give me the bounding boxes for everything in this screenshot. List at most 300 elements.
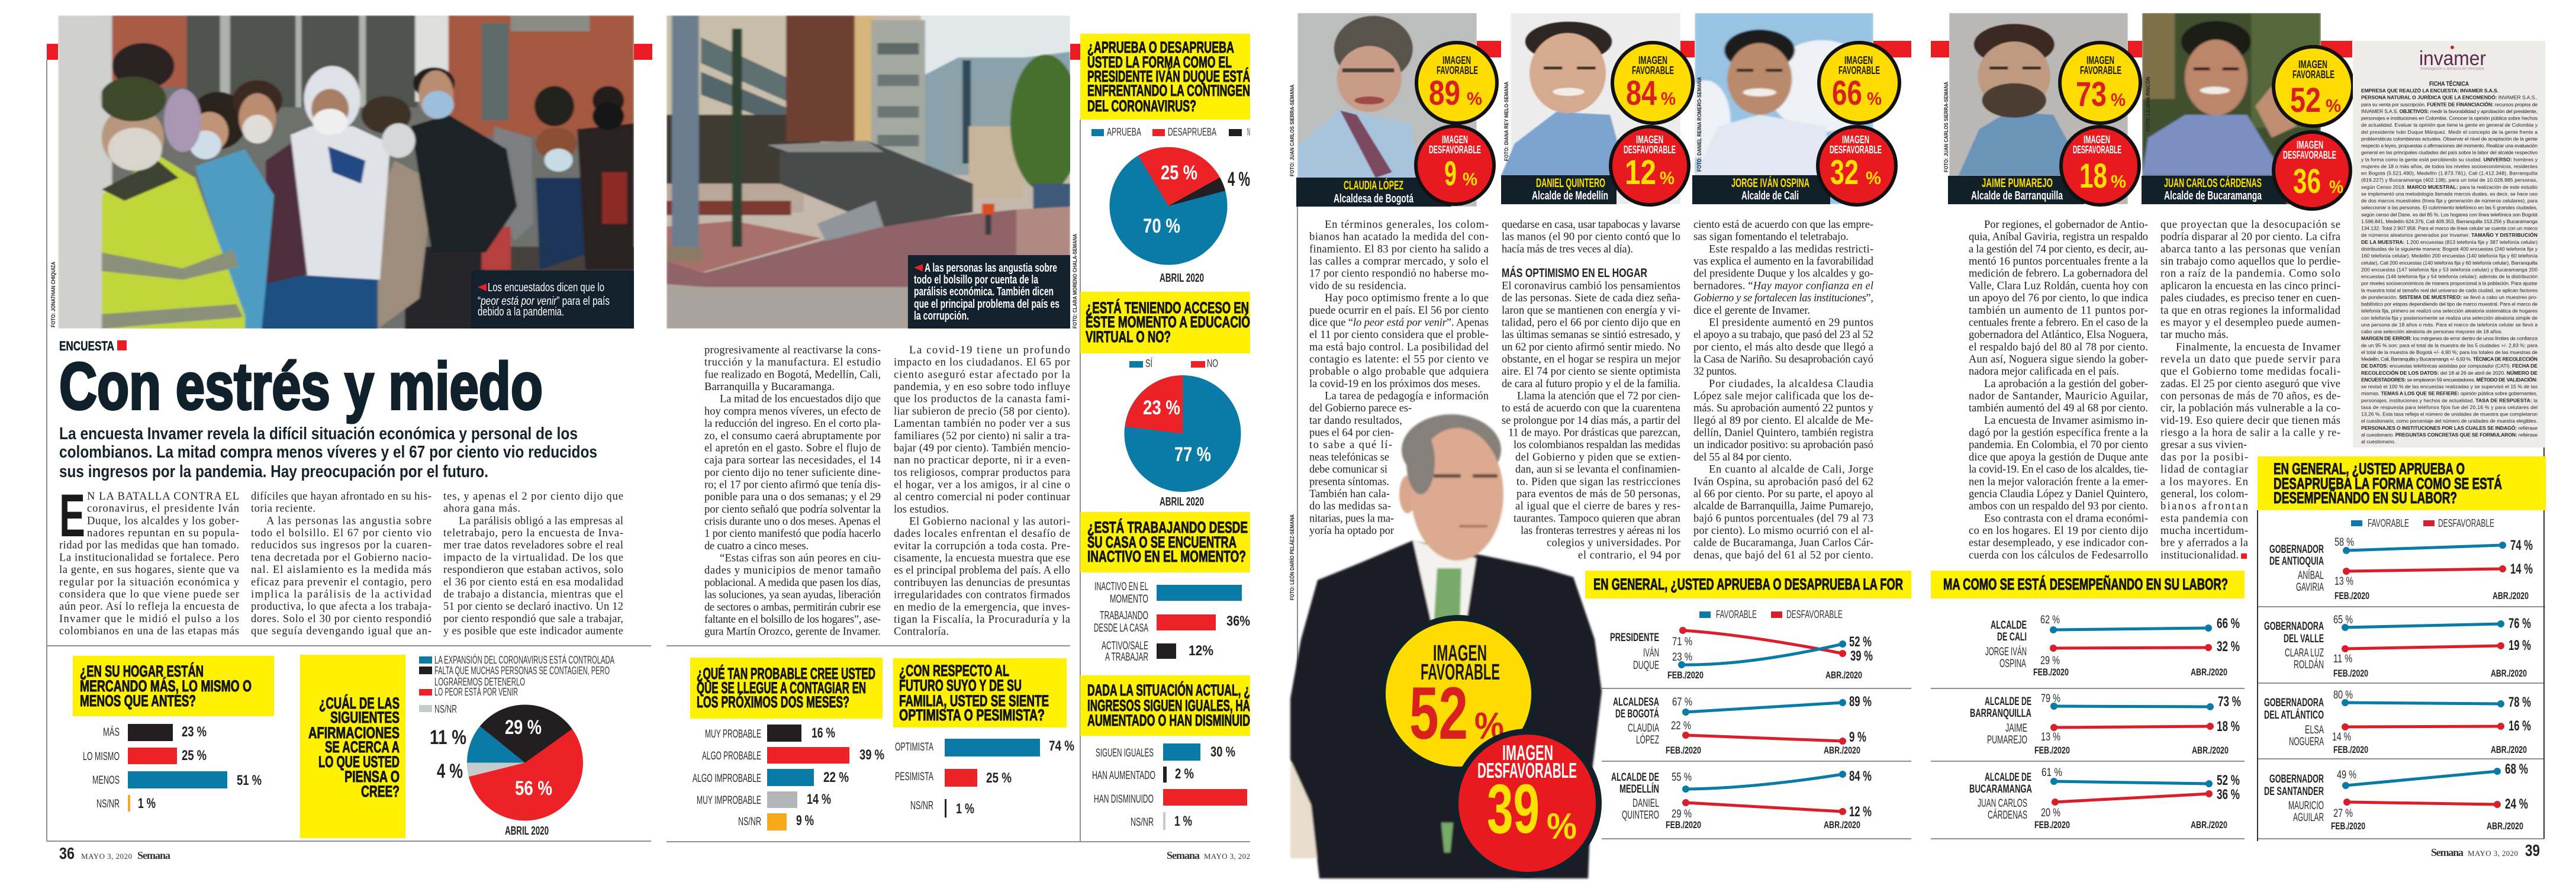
- line chart: gobernadora del Valle: 19 %: [2509, 638, 2531, 653]
- badges: Quintero: 84: [1626, 74, 1657, 112]
- line chart: gobernador de Santander: DE SANTANDER: [2264, 785, 2324, 798]
- article text page 38: El coronavirus cambió los pensamientos: [1502, 280, 1680, 292]
- bar chart: mercado en el hogar: MENOS: [92, 774, 120, 787]
- ficha tecnica text: se implementó una metodología llamada marcos duales, es decir, se hace uso: [2361, 191, 2538, 197]
- pie chart: afirmaciones: NS/NR: [434, 703, 457, 715]
- article text page 36: La parálisis obligó a las empresas al: [459, 515, 623, 527]
- photo credits mayors: [1289, 77, 2151, 176]
- line chart: alcalde de Barranquilla: [1970, 693, 2241, 756]
- ficha tecnica text: EMPRESA QUE REALIZÓ LA ENCUESTA: INVAMER S.A.S.: [2361, 87, 2498, 94]
- photo caption: street: A las personas las angustia sobre: [925, 262, 1057, 275]
- footer page 39: 39: [2525, 841, 2540, 859]
- badges: Quintero: DESFAVORABLE: [1624, 144, 1676, 156]
- article text page 38: quedarse en casa, usar tapabocas y lavarse: [1502, 219, 1680, 231]
- line chart: gobernadora del Atlantico: GOBERNADORA: [2264, 697, 2324, 709]
- line chart: gobernador de Santander: AGUILAR: [2293, 812, 2324, 824]
- badge: imagen favorable Duque: 52: [1409, 672, 1468, 755]
- photo credits mayors: FOTO: JUAN CARLOS SIERRA-SEMANA: [1943, 82, 1949, 172]
- badge: imagen favorable Duque: IMAGEN: [1433, 641, 1487, 666]
- pie chart: afirmaciones: SIGUIENTES: [330, 709, 400, 726]
- article text page 38: bajó 6 puntos porcentuales (del 79 al 73: [1693, 513, 1873, 524]
- line chart: presidente Duque: PRESIDENTE: [1610, 632, 1659, 644]
- portrait: Juan Carlos Cardenas: [2142, 13, 2321, 205]
- line chart: alcalde de Barranquilla: 79 %: [2041, 693, 2060, 705]
- article text page 38: los colombianos respaldan las medidas: [1514, 439, 1680, 451]
- article text page 36: N LA BATALLA CONTRA EL: [87, 491, 239, 503]
- article text page 36: nal. El aislamiento es la medida más: [251, 564, 432, 576]
- line chart: alcalde de Bucaramanga: 61 %: [2042, 767, 2062, 779]
- line chart: alcalde de Cali: OSPINA: [1999, 658, 2026, 670]
- article text page 39: la covid-19. En el caso de los alcaldes, tie-: [1969, 464, 2148, 476]
- legend: FAVORABLE: [2368, 517, 2409, 529]
- article text page 38: para eventos de más de 50 personas,: [1516, 488, 1680, 500]
- badges: Ospina: %: [1866, 168, 1881, 188]
- pie chart: educacion virtual: 23 %: [1143, 397, 1180, 419]
- pie chart: educacion virtual: ESTE MOMENTO A EDUCACIÓ: [1086, 313, 1250, 331]
- bar chart: trabajo: INACTIVO EN EL MOMENTO?: [1087, 548, 1246, 565]
- article text page 39: tar mucho más.: [2160, 329, 2229, 341]
- article text page 39: nen la mejor valoración frente a la emer-: [1969, 476, 2148, 488]
- article text page 39: zadas. El 25 por ciento aseguró que vive: [2160, 378, 2340, 390]
- footer page 39: MAYO 3, 2020: [2468, 849, 2518, 858]
- portrait: Claudia Lopez: [1297, 13, 1477, 207]
- deck: colombianos. La mitad compra menos víveres y el 67 por ciento vio reducidos: [59, 443, 597, 462]
- line chart: gobernador de Antioquia: GOBERNADOR: [2269, 543, 2324, 556]
- article text page 38: yoría ha optado por: [1309, 525, 1394, 537]
- ficha tecnica text: respecto a leyes, propuestas o afirmaciones del momento. Realizar una evaluación: [2361, 143, 2538, 149]
- line chart: gobernador de Santander: FEB./2020: [2331, 820, 2365, 832]
- article text page 38: la covid-19 en los próximos dos meses.: [1309, 378, 1480, 390]
- bar chart: probabilidad de contagio: 16 %: [812, 725, 835, 741]
- article text page 37: “Estas cifras son aún peores en ciu-: [720, 553, 881, 565]
- article text page 38: tar dando resultados,: [1309, 415, 1402, 427]
- ficha tecnica text: al cuestionario.: [2361, 439, 2395, 445]
- line chart: alcalde de Cali: ALCALDE: [1991, 619, 2027, 632]
- article text page 39: esta pandemia con: [2160, 513, 2248, 524]
- article text page 37: de sectores o ambas, permitirán cubrir ese: [704, 601, 881, 613]
- article text page 38: Este respaldo a las medidas restricti-: [1709, 243, 1873, 255]
- bar chart: ingresos: 1 %: [1174, 813, 1192, 829]
- article text page 38: por ciento). Lo mismo ocurrió con el al-: [1693, 525, 1873, 537]
- badge: imagen desfavorable Duque: DESFAVORABLE: [1477, 758, 1577, 783]
- article text page 37: irregularidades con contratos firmados: [894, 590, 1070, 601]
- line chart: presidente Duque: [1610, 627, 1873, 681]
- badges: Cardenas: 52: [2290, 81, 2321, 120]
- bar chart: mercado en el hogar: MENOS QUE ANTES?: [80, 692, 196, 710]
- article text page 38: to sabe a qué lí-: [1309, 439, 1392, 451]
- line chart: gobernador de Antioquia: ABR./2020: [2493, 590, 2529, 601]
- badges: Pumarejo: FAVORABLE: [2080, 65, 2121, 76]
- ficha tecnica text: ENCUESTADORES: se emplearon 59 encuestadores. MÉTODO DE VALIDACIÓN:: [2361, 376, 2538, 382]
- article text page 37: dades locales enfrentan el desafío de: [894, 528, 1070, 540]
- bar chart: trabajo: INACTIVO EN EL: [1094, 581, 1148, 593]
- line chart: alcalde de Medellin: ABR./2020: [1824, 819, 1860, 830]
- article text page 38: calde de Bucaramanga, Juan Carlos Cár-: [1693, 537, 1873, 549]
- article text page 38: Iván Ospina, su aprobación pasó del 62: [1693, 476, 1873, 488]
- line chart: alcalde de Barranquilla: BARRANQUILLA: [1970, 707, 2031, 720]
- article text page 38: llegó al 89 por ciento. El alcalde de Me-: [1693, 415, 1873, 427]
- article text page 38: to. Piden que sigan las restricciones: [1516, 476, 1680, 488]
- article text page 38: denas, que bajó del 61 al 52 por ciento.: [1693, 549, 1873, 561]
- article text page 37: de cuatro a cinco meses.: [704, 540, 809, 552]
- article text page 39: [1969, 219, 2341, 561]
- article text page 37: las soluciones, ya sean ayudas, liberación: [704, 590, 881, 601]
- article text page 38: colegios y universidades. Por: [1547, 537, 1680, 549]
- article text page 39: también un aumento de 11 puntos por-: [1969, 305, 2148, 317]
- line chart: alcaldesa de Bogota: 89 %: [1849, 694, 1872, 710]
- article text page 38: del presidente Duque y los alcaldes y go-: [1693, 268, 1873, 280]
- article text page 39: es mayor y el desempleo puede aumen-: [2160, 317, 2340, 329]
- heading band: alcaldes (spread): [1585, 571, 2245, 598]
- line chart: gobernadora del Atlantico: [2264, 689, 2531, 755]
- pie chart: aprobacion Duque: ENFRENTANDO LA CONTINGEN: [1087, 82, 1250, 99]
- article text page 38: las calles a comprar mercado, y solo el: [1309, 256, 1489, 268]
- article text page 37: caja para sortear las necesidades, el 14: [704, 455, 881, 466]
- footer page 37: MAYO 3, 202: [1204, 852, 1250, 861]
- badges: Pumarejo: IMAGEN: [2084, 134, 2110, 146]
- badges: Quintero: %: [1660, 168, 1675, 188]
- article text page 37: liar subieron de precio (58 por ciento).: [894, 405, 1070, 417]
- bar chart: ingresos: HAN AUMENTADO: [1092, 770, 1155, 782]
- pie chart: aprobacion Duque: ¿APRUEBA O DESAPRUEBA: [1087, 38, 1234, 56]
- deck: sus ingresos por la pandemia. Hay preocupación por el futuro.: [59, 462, 488, 481]
- bar chart: optimismo: NS/NR: [910, 800, 933, 812]
- bar chart: mercado en el hogar: 1 %: [138, 796, 156, 812]
- title: Con estrés y miedo: [59, 349, 543, 423]
- line chart: alcalde de Bucaramanga: [1969, 767, 2240, 830]
- article text page 37: hoy compra menos víveres, un efecto de: [704, 405, 881, 417]
- badges: Cardenas: 36: [2293, 162, 2321, 201]
- ficha tecnica text: encuestas (146 telefonía fija y 54 telefonía celular); además de la distribución: [2361, 273, 2538, 279]
- line chart: gobernadora del Valle: 65 %: [2333, 614, 2353, 626]
- line chart: gobernadora del Valle: 11 %: [2333, 653, 2352, 665]
- bar chart: probabilidad de contagio: MUY PROBABLE: [705, 728, 761, 741]
- article text page 36: Invamer que le midió el pulso a los: [59, 613, 239, 625]
- article text page 36: La institucionalidad se fortalece. Pero: [59, 552, 239, 564]
- line chart: gobernadora del Atlantico: ELSA: [2305, 724, 2324, 736]
- bar chart: trabajo: SU CASA O SE ENCUENTRA: [1087, 533, 1237, 551]
- bar chart: optimismo: PESIMISTA: [895, 771, 933, 783]
- article text page 38: probable o algo probable que adquiera: [1309, 366, 1489, 378]
- badges: Cardenas: [2274, 47, 2353, 209]
- ficha tecnica text: la muestra total al tamaño real del universo de cada ciudad, se aplican factores: [2361, 287, 2538, 293]
- article text page 39: pandemia. En Colombia, el 70 por ciento: [1969, 439, 2148, 451]
- article text page 38: vas explica el aumento en la favorabilidad: [1693, 256, 1874, 268]
- bar chart: trabajo: A TRABAJAR: [1105, 651, 1148, 664]
- line chart: presidente Duque: FEB./2020: [1667, 669, 1704, 681]
- line chart: gobernador de Antioquia: DE ANTIOQUIA: [2269, 555, 2324, 568]
- article text page 36: de trabajo a distancia, mientras que el: [443, 588, 623, 600]
- portrait: Jorge Ivan Ospina: [1680, 13, 1876, 204]
- bar chart: probabilidad de contagio: LOS PRÓXIMOS DOS MESES?: [697, 693, 849, 711]
- article text page 36: respondieron que estaban activos, solo: [443, 564, 623, 576]
- line chart: gobernadora del Valle: CLARA LUZ: [2285, 647, 2324, 659]
- article text page 36: 51 por ciento se declaró inactivo. Un 12: [443, 601, 623, 613]
- name bar: Claudia Lopez: [1296, 178, 1451, 207]
- section label: ENCUESTA: ENCUESTA: [59, 339, 114, 353]
- line chart: alcalde de Barranquilla: ABR./2020: [2192, 745, 2229, 756]
- footer page 36: [59, 844, 170, 862]
- heading band: alcaldes (spread): MA COMO SE ESTÁ DESEMPEÑANDO EN SU LABOR?: [1943, 575, 2228, 593]
- article text page 39: ron a raíz de la pandemia. Como solo: [2160, 268, 2340, 280]
- bar chart: ingresos: AUMENTADO O HAN DISMINUID: [1087, 712, 1250, 729]
- bar chart: trabajo: ¿ESTÁ TRABAJANDO DESDE: [1087, 518, 1248, 536]
- bar chart: mercado en el hogar: 51 %: [237, 772, 262, 788]
- line chart: gobernador de Santander: 68 %: [2505, 761, 2528, 777]
- line chart: alcalde de Medellin: DANIEL: [1632, 797, 1659, 810]
- bar chart: mercado en el hogar: ¿EN SU HOGAR ESTÁN: [80, 662, 204, 680]
- ficha tecnica text: al cuestionario. PREGUNTAS CONCRETAS QUE SE FORMULARON: refiérase: [2361, 432, 2538, 438]
- photo credit: FOTO: CLARA MORENO CHALA-SEMANA: [1072, 234, 1078, 329]
- legend: [1699, 609, 1843, 620]
- article text page 39: Finalmente, la encuesta de Invamer: [2176, 342, 2340, 353]
- line chart: gobernador de Antioquia: [2269, 536, 2533, 601]
- article text page 36: tes, y apenas el 2 por ciento dijo que: [443, 491, 623, 503]
- line chart: gobernadora del Atlantico: 78 %: [2509, 694, 2531, 710]
- pie chart: aprobacion Duque: USTED LA FORMA COMO EL: [1087, 53, 1232, 71]
- article text page 38: sas sigan fomentando el teletrabajo.: [1693, 231, 1849, 243]
- ficha tecnica text: celular), Cali 200 encuestas (140 telefonía fija y 60 telefonía celular), Barranquilla: [2361, 260, 2538, 266]
- article text page 37: Contraloría.: [894, 626, 949, 638]
- article text page 38: MÁS OPTIMISMO EN EL HOGAR: [1502, 266, 1647, 280]
- article text page 39: dagó por la gestión específica frente a la: [1969, 427, 2148, 439]
- article text page 37: poblacional. A medida que pasen los días,: [704, 577, 881, 589]
- article text page 36: que seguía devengando igual que an-: [251, 625, 432, 637]
- photo caption: queue: Los encuestados dicen que lo: [488, 281, 604, 294]
- line chart: alcalde de Medellin: QUINTERO: [1622, 809, 1659, 822]
- line chart: gobernadora del Valle: FEB./2020: [2333, 668, 2368, 679]
- line chart: gobernadora del Atlantico: 80 %: [2333, 689, 2353, 701]
- article text page 37: crisis durante uno o dos meses. Apenas el: [704, 516, 881, 528]
- line chart: alcalde de Medellin: 55 %: [1672, 771, 1692, 784]
- line chart: gobernador de Antioquia: 13 %: [2334, 575, 2353, 588]
- line chart: gobernadora del Atlantico: DEL ATLÁNTICO: [2264, 709, 2324, 722]
- article text page 36: ahora gana más.: [443, 503, 520, 515]
- article text page 37: la reducción del ingreso. En el corto pla-: [704, 418, 881, 430]
- ficha tecnica text: general en las principales ciudades del país sobre la labor del alcalde respectivo: [2361, 150, 2538, 156]
- badges: Pumarejo: 18: [2079, 157, 2107, 195]
- article text page 37: trucción y la manufactura. El estudio: [704, 357, 881, 369]
- line chart: alcalde de Medellin: 84 %: [1849, 768, 1872, 784]
- bar chart: probabilidad de contagio: 39 %: [859, 747, 884, 763]
- line chart: alcalde de Bucaramanga: BUCARAMANGA: [1969, 783, 2032, 796]
- photo caption: street: [908, 255, 1070, 329]
- article text page 38: En términos generales, los colom-: [1325, 219, 1489, 231]
- footer page 37: [1167, 849, 1250, 861]
- badges: Lopez: IMAGEN: [1442, 134, 1468, 146]
- line chart: alcalde de Medellin: [1611, 768, 1872, 830]
- article text page 39: abarca tanto a las personas que venían: [2160, 243, 2340, 255]
- photo caption: street: parálisis económica. También dicen: [914, 285, 1054, 298]
- article text page 38: Por ciudades, la alcaldesa Claudia: [1709, 378, 1873, 390]
- bar chart: probabilidad de contagio: MUY IMPROBABLE: [697, 794, 761, 807]
- article text page 37: contribuyen las denuncias de presuntas: [894, 577, 1070, 589]
- article text page 38: más. Su aprobación aumentó 22 puntos y: [1693, 403, 1874, 414]
- photo credits mayors: FOTO: JUAN CARLOS SIERRA-SEMANA: [1289, 85, 1295, 176]
- ficha tecnica text: cabo una selección aleatoria de personas mayores de 18 años.: [2361, 329, 2503, 334]
- name bar: Daniel Quintero: DANIEL QUINTERO: [1536, 176, 1605, 190]
- badges: Cardenas: IMAGEN: [2297, 139, 2323, 151]
- pie chart: afirmaciones: LO PEOR ESTÁ POR VENIR: [434, 686, 518, 698]
- article text page 38: ma está bajo control. La posibilidad del: [1309, 342, 1489, 353]
- article text page 39: ta que en otras regiones la informalidad: [2160, 305, 2341, 317]
- article text page 37: por ciento señaló que podría solventar la: [704, 504, 881, 516]
- badge: imagen favorable Duque: FAVORABLE: [1421, 660, 1500, 685]
- article text page 37: es el principal problema del país. A ello: [894, 565, 1070, 577]
- bar chart: ingresos: INGRESOS SIGUEN IGUALES, HA: [1087, 697, 1250, 714]
- article text page 38: se prolongue por 14 días más, a partir del: [1502, 415, 1680, 427]
- line chart: alcalde de Barranquilla: ALCALDE DE: [1985, 696, 2031, 708]
- ficha tecnica text: PERSONAJES O INSTITUCIONES POR LAS CUALES SE INDAGÓ: refiérase: [2361, 424, 2538, 431]
- article text page 38: Hay poco optimismo frente a lo que: [1325, 292, 1489, 304]
- article text page 38: López sale mejor calificada que los de-: [1693, 391, 1873, 403]
- bar chart: ingresos: 2 %: [1175, 766, 1194, 782]
- badges: Quintero: FAVORABLE: [1632, 65, 1674, 76]
- pie chart: aprobacion Duque: 25 %: [1161, 162, 1197, 184]
- article text page 37: La mitad de los encuestados dijo que: [720, 394, 881, 405]
- deck: [59, 424, 597, 481]
- article text page 38: El presidente aumentó en 29 puntos: [1709, 317, 1873, 329]
- line chart: gobernadora del Valle: ABR./2020: [2491, 668, 2527, 679]
- pie chart: afirmaciones: ¿CUÁL DE LAS: [319, 694, 400, 712]
- line chart: gobernadora del Atlantico: NOGUERA: [2289, 736, 2324, 748]
- bar chart: probabilidad de contagio: QUE SE LLEGUE A CONTAGIAR EN: [697, 679, 866, 697]
- article text page 38: to está de acuerdo con que la cuarentena: [1502, 403, 1680, 414]
- ficha tecnica text: RECOLECCIÓN DE LOS DATOS: del 18 al 26 de abril de 2020. NÚMERO DE: [2361, 369, 2538, 376]
- pie chart: educacion virtual: 77 %: [1174, 443, 1211, 466]
- article text page 39: gresar a sus vivien-: [2160, 439, 2247, 451]
- line chart: alcaldesa de Bogota: 67 %: [1672, 696, 1692, 709]
- ficha tecnica text: mismas. TEMAS A LOS QUE SE REFIERE: opinión pública sobre gobernantes,: [2361, 391, 2538, 397]
- badges: Quintero: IMAGEN: [1636, 134, 1663, 146]
- article text page 39: das por la posibi-: [2160, 452, 2248, 463]
- pie chart: aprobacion Duque: APRUEBA: [1107, 126, 1141, 138]
- badges: Lopez: 89: [1429, 74, 1460, 112]
- article text page 38: 11 de mayo. Por drásticas que parezcan,: [1508, 427, 1680, 439]
- ficha tecnica text: el cuestionario, como porcentaje del número de unidades de muestra elegibles.: [2361, 418, 2538, 424]
- bar chart: optimismo: [893, 658, 1074, 817]
- article text page 36: [59, 491, 624, 637]
- badges: Ospina: DESFAVORABLE: [1830, 144, 1882, 156]
- photo credits mayors: FOTO: DIANA REY MELO-SEMANA: [1503, 82, 1509, 161]
- pie chart: afirmaciones: 4 %: [437, 760, 463, 783]
- article text page 37: tigan la Fiscalía, la Procuraduría y la: [894, 614, 1070, 626]
- photo credits mayors: FOTO: DANIEL REINA ROMERO-SEMANA: [1696, 77, 1702, 172]
- badges: Lopez: DESFAVORABLE: [1429, 144, 1481, 156]
- article text page 38: dice el gerente de Invamer.: [1693, 305, 1810, 317]
- article text page 36: reducidos sus ingresos por la cuaren-: [251, 540, 432, 552]
- article text page 38: laron que se mantienen con energía y vi-: [1502, 305, 1680, 317]
- article text page 39: nadora mejor calificada en el país.: [1969, 366, 2119, 378]
- article text page 38: dan, aun si se levanta el confinamien-: [1515, 464, 1680, 476]
- line chart: alcaldesa de Bogota: 9 %: [1849, 729, 1866, 745]
- pie chart: aprobacion Duque: 70 %: [1143, 215, 1180, 237]
- article text page 36: coronavirus, el presidente Iván: [87, 503, 239, 515]
- article text page 38: el 11 por ciento considera que el proble-: [1309, 329, 1489, 341]
- article text page 39: revela un dato que puede servir para: [2160, 354, 2340, 366]
- ficha tecnica text: se revisó el 100 % de las encuestas realizadas y se supervisó el 15 % de las: [2361, 384, 2538, 389]
- photo credit: FOTO: JONATHAN CHIQUIZA: [50, 262, 56, 327]
- article text page 37: impacto en los ciudadanos. El 65 por: [894, 357, 1070, 369]
- ficha tecnica text: FICHA TÉCNICA: [2429, 80, 2469, 88]
- heading band: gobernadores: [2258, 456, 2546, 510]
- photo: people queueing with masks: [58, 15, 635, 330]
- line chart: alcalde de Cali: 32 %: [2217, 639, 2240, 655]
- article text page 38: do las medidas sa-: [1309, 501, 1391, 513]
- article text page 38: puede ocurrir en el país. El 56 por ciento: [1309, 305, 1489, 317]
- badge: imagen favorable Duque: [1383, 618, 1534, 770]
- article text page 38: nitarias, pues la ma-: [1309, 513, 1394, 524]
- bar chart: ingresos: NS/NR: [1131, 816, 1154, 829]
- article text page 39: a los mayores. En: [2160, 476, 2248, 488]
- line chart: gobernador de Antioquia: ANÍBAL: [2298, 569, 2324, 582]
- pie chart: afirmaciones: FALTA QUE MUCHAS PERSONAS SE CONTAGIEN, PERO: [434, 665, 610, 677]
- article text page 39: quia, Aníbal Gaviria, registra un respaldo: [1969, 231, 2148, 243]
- pie chart: aprobacion Duque: DESAPRUEBA: [1168, 126, 1216, 138]
- badge: imagen desfavorable Duque: [1456, 732, 1599, 875]
- line chart: gobernador de Santander: GOBERNADOR: [2269, 773, 2324, 785]
- article text page 36: y es posible que este indicador aumente: [443, 625, 623, 637]
- article text page 38: las manos (el 90 por ciento contó que lo: [1502, 231, 1680, 243]
- drop cap: E: [59, 482, 85, 549]
- article text page 39: estar desempleado, y ese indicador con-: [1969, 537, 2148, 549]
- line chart: alcalde de Barranquilla: PUMAREJO: [1987, 734, 2027, 746]
- ficha tecnica text: 1.596.841, Medellín 624.376, Cali 409.353, Barranquilla 153.256 y Bucaramanga: [2361, 218, 2538, 224]
- ficha tecnica text: según censo del Dane, es del 85 %. Los hogares con línea telefónica son Bogotá: [2361, 211, 2538, 217]
- line chart: alcalde de Medellin: ALCALDE DE: [1611, 771, 1659, 784]
- article text page 38: 32 puntos.: [1693, 366, 1737, 378]
- line chart: alcalde de Cali: FEB./2020: [2033, 667, 2069, 678]
- article text page 37: cisamente, la encuesta muestra que ese: [894, 553, 1070, 565]
- article text page 36: el 36 por ciento está en esa modalidad: [443, 577, 624, 588]
- legend: DESFAVORABLE: [1786, 609, 1843, 620]
- name bar: Juan Carlos Cardenas: [2142, 176, 2286, 204]
- article text page 36: todo el bolsillo. El 67 por ciento vio: [251, 527, 432, 539]
- article text page 38: pues el 64 por cien-: [1309, 427, 1394, 439]
- article text page 38: el contrario, el 94 por: [1578, 549, 1680, 561]
- article text page 39: que el Gobierno tome medidas focali-: [2160, 366, 2340, 378]
- badges: Lopez: [1416, 43, 1497, 204]
- bar chart: ingresos: SIGUEN IGUALES: [1096, 747, 1154, 759]
- name bar: Daniel Quintero: [1501, 175, 1617, 204]
- article text page 39: un apoyo del 76 por ciento, lo que indica: [1969, 292, 2148, 304]
- ficha tecnica text: mujeres de 18 o más años, de todos los niveles socioeconómicos, residentes: [2361, 163, 2538, 169]
- article text page 36: implica la parálisis de la actividad: [251, 588, 432, 600]
- line chart: alcaldesa de Bogota: ALCALDESA: [1613, 696, 1659, 709]
- line chart: alcaldesa de Bogota: LÓPEZ: [1636, 733, 1659, 746]
- article text page 39: institucionalidad.: [2160, 549, 2239, 561]
- line chart: gobernadora del Atlantico: 16 %: [2509, 718, 2531, 734]
- article text page 36: ridad por las medidas que han tomado.: [59, 540, 239, 552]
- name bar: Jaime Pumarejo: Alcalde de Barranquilla: [1971, 189, 2063, 202]
- bar chart: probabilidad de contagio: ALGO PROBABLE: [702, 750, 761, 762]
- line chart: alcalde de Cali: 66 %: [2217, 616, 2240, 632]
- ficha tecnica text: seleccionar a las personas. El cubrimiento telefónico en las 5 grandes ciudades,: [2361, 205, 2538, 211]
- line chart: gobernador de Antioquia: 14 %: [2510, 561, 2533, 577]
- bar chart: ingresos: 30 %: [1210, 744, 1235, 760]
- line chart: presidente Duque: ABR./2020: [1825, 669, 1862, 681]
- badges: Quintero: [1611, 43, 1693, 205]
- pie chart: afirmaciones: 11 %: [430, 726, 466, 749]
- ficha tecnica text: según Censo 2018. MARCO MUESTRAL: para la realización de este estudio: [2361, 184, 2538, 190]
- badge: imagen favorable Duque: %: [1474, 704, 1504, 747]
- article text page 39: riesgo a la hora de salir a la calle y re-: [2160, 427, 2340, 439]
- line chart: alcaldesa de Bogota: 22 %: [1671, 720, 1691, 732]
- ficha tecnica text: una persona de 18 años o más. Para el marco de telefonía celular se llevó a: [2361, 321, 2538, 327]
- article text page 37: zo, el consumo caerá abruptamente por: [704, 430, 881, 442]
- article text page 39: La encuesta de Invamer asimismo in-: [1984, 415, 2148, 427]
- bar chart: mercado en el hogar: [73, 656, 274, 812]
